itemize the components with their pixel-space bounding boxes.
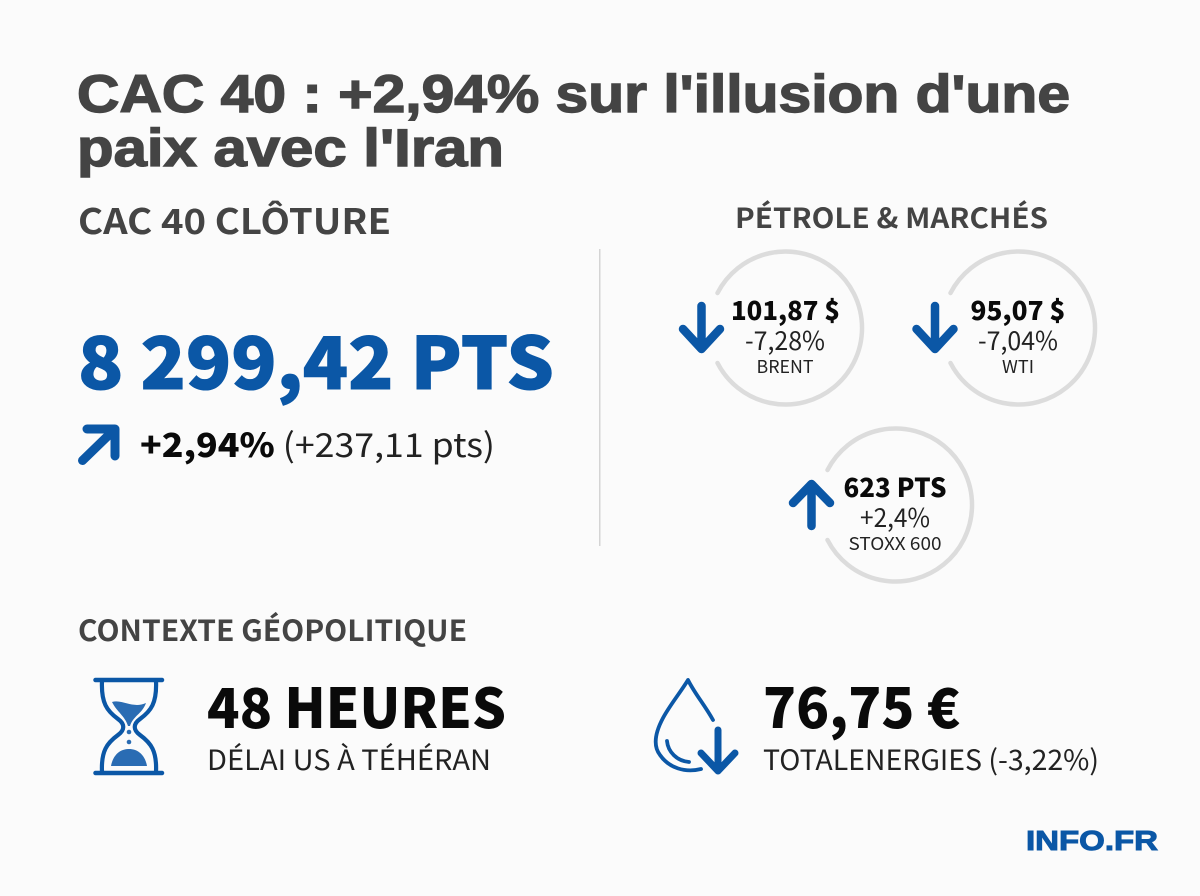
icon: up-right arrow	[82, 429, 115, 460]
market: STOXX 600: STOXX 600	[848, 530, 942, 556]
stat: TotalEnergies	[763, 664, 1099, 779]
heading: pétrole et marchés: PÉTROLE & MARCHÉS	[735, 197, 1048, 237]
title	[77, 65, 1070, 178]
title: CAC 40 : +2,94% sur l'illusion d'une	[77, 65, 1070, 124]
market: STOXX 600: +2,4%	[860, 498, 930, 535]
market: STOXX 600: 623 PTS	[844, 468, 946, 505]
stat: TotalEnergies: TOTALENERGIES (-3,22%)	[763, 739, 1099, 779]
market: WTI: 95,07 $	[970, 291, 1066, 328]
panel: CAC 40 value	[78, 305, 554, 467]
variation text: +2,94% (+237,11 pts)	[140, 419, 495, 467]
market: WTI	[916, 252, 1095, 404]
stat: 48 heures: DÉLAI US À TÉHÉRAN	[207, 739, 491, 779]
heading: CAC 40 clôture: CAC 40 CLÔTURE	[78, 194, 391, 245]
title: paix avec l'Iran	[77, 119, 504, 178]
market: STOXX 600	[793, 428, 972, 581]
market: WTI: -7,04%	[978, 321, 1058, 358]
market: Brent: BRENT	[756, 353, 814, 379]
market: Brent	[683, 252, 862, 404]
market: Brent: 101,87 $	[731, 291, 840, 328]
brand logo: INFO.FR	[1026, 825, 1158, 856]
stat: 48 heures	[207, 664, 506, 779]
heading: contexte géopolitique: CONTEXTE GÉOPOLITIQUE	[78, 608, 467, 650]
market: WTI: WTI	[1002, 353, 1034, 379]
market: Brent: -7,28%	[745, 321, 825, 358]
icon: hourglass	[96, 680, 162, 773]
stat: TotalEnergies: 76,75 €	[763, 664, 960, 744]
main value: 8 299,42 PTS	[78, 305, 554, 410]
stat: 48 heures: 48 HEURES	[207, 664, 506, 744]
icon: oil drop with down arrow	[656, 680, 735, 771]
panel: markets	[683, 252, 1095, 581]
